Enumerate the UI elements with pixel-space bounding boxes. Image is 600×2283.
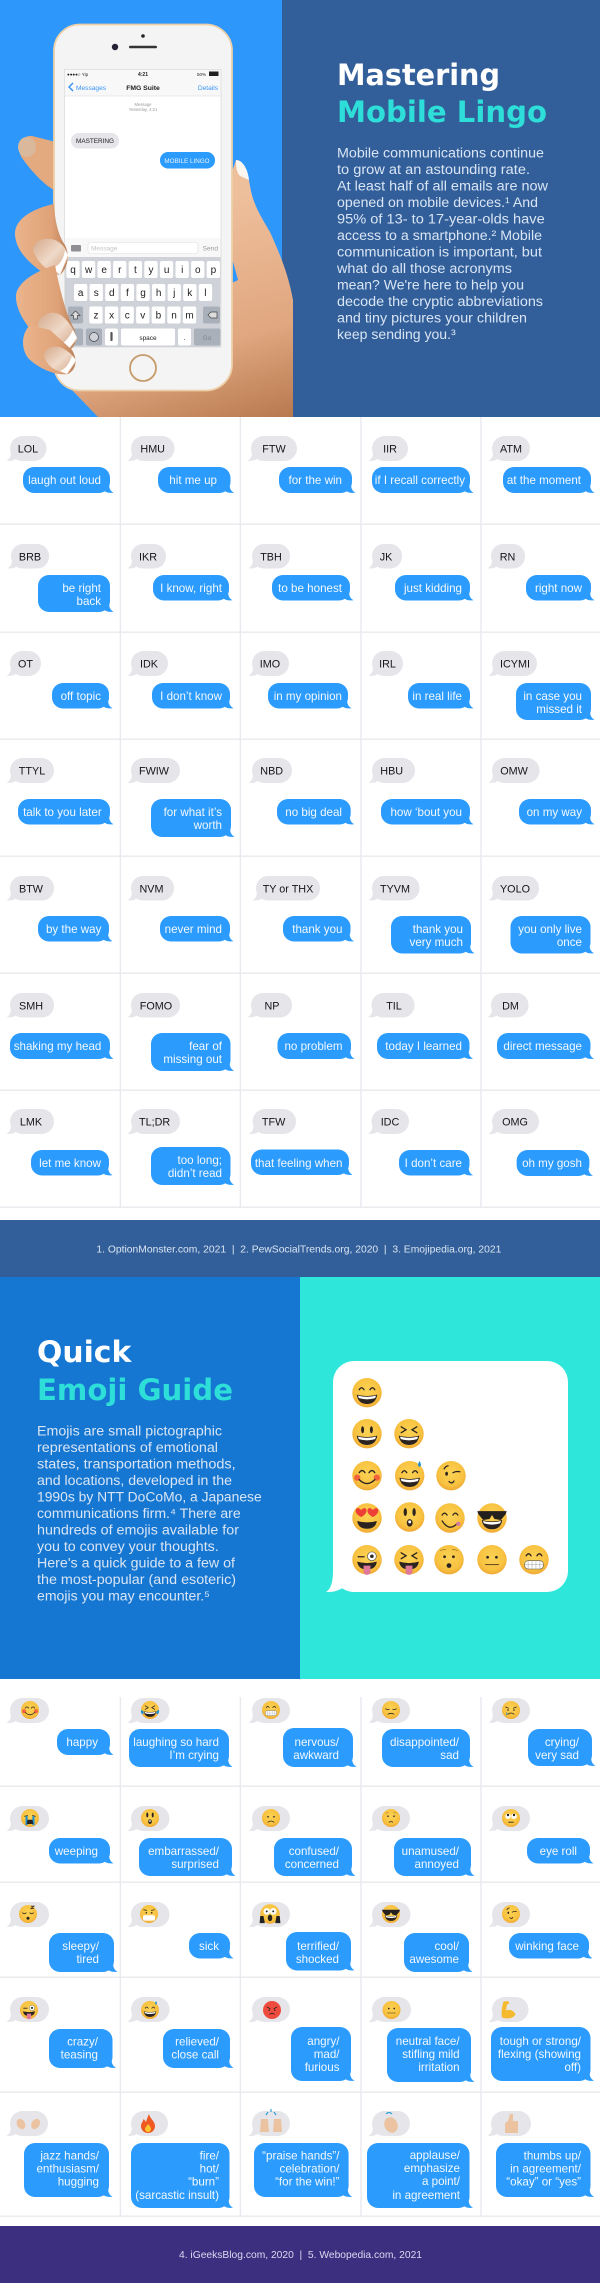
phone keyboard: n	[171, 310, 177, 322]
phone keyboard: f	[126, 288, 129, 299]
relieved: relieved/	[175, 2036, 220, 2048]
crazy: crazy/	[67, 2036, 99, 2048]
sleepy: sleepy/	[62, 1940, 100, 1953]
TBH: to be honest	[278, 582, 343, 595]
finger with french nail, upper	[15, 204, 68, 275]
weeping: weeping	[54, 1845, 98, 1858]
thumbs up: “okay” or “yes”	[506, 2176, 581, 2188]
illustration: hand holding phone	[15, 24, 293, 417]
panel: emoji grid	[6, 1698, 596, 2208]
nervous: nervous/	[295, 1736, 340, 1749]
terrified	[248, 1902, 354, 1970]
phone body	[54, 24, 232, 390]
relieved: close call	[171, 2048, 219, 2062]
sleepy: tired	[76, 1953, 99, 1966]
unamused	[368, 1806, 474, 1876]
TFW: that feeling when	[255, 1157, 342, 1170]
IRL	[368, 651, 474, 708]
angry: mad/	[314, 2048, 340, 2061]
cool: cool/	[434, 1940, 460, 1953]
relieved	[128, 1997, 234, 2068]
sick	[128, 1902, 234, 1958]
phone keyboard: k	[187, 288, 193, 299]
tough or strong: tough or strong/	[500, 2035, 582, 2048]
emoji intro paragraph: and locations, developed in the	[37, 1473, 232, 1488]
FWIW: FWIW	[139, 766, 170, 778]
DM	[488, 993, 594, 1059]
phone keyboard: v	[140, 310, 145, 322]
applause: applause/	[410, 2149, 461, 2162]
sleepy	[6, 1902, 118, 1972]
OMG: oh my gosh	[522, 1157, 582, 1170]
TL;DR	[128, 1109, 234, 1185]
IRL: in real life	[412, 690, 462, 703]
phone screen: Yesterday, 4:21	[129, 107, 158, 112]
terrified: terrified/	[297, 1940, 340, 1953]
FTW	[248, 436, 356, 493]
disappointed: sad	[440, 1749, 459, 1762]
laughing so hard	[128, 1698, 232, 1767]
crazy	[6, 1997, 116, 2068]
DM: direct message	[503, 1040, 582, 1053]
TTYL	[6, 758, 114, 824]
angry: furious	[305, 2061, 340, 2074]
BRB: be right	[62, 582, 102, 595]
phone keyboard: .	[184, 335, 186, 342]
confused: concerned	[285, 1858, 339, 1871]
RN	[488, 544, 594, 600]
NBD: NBD	[260, 766, 283, 778]
TY or THX: TY or THX	[263, 884, 313, 896]
heading: Mastering Mobile Lingo: Mobile Lingo	[337, 95, 547, 129]
BTW: by the way	[46, 923, 102, 936]
unamused: annoyed	[415, 1858, 459, 1871]
cool	[368, 1902, 472, 1972]
weeping	[6, 1806, 114, 1864]
intro paragraph	[336, 146, 548, 342]
phone keyboard: a	[78, 288, 84, 299]
FOMO: fear of	[189, 1040, 223, 1053]
LOL: LOL	[18, 444, 38, 456]
BTW: BTW	[19, 884, 44, 896]
phone screen: Messages	[76, 85, 107, 92]
BTW	[6, 876, 112, 942]
phone keyboard: x	[109, 310, 114, 322]
footer bar: sources 1-3	[0, 1220, 600, 1277]
IIR: if I recall correctly	[375, 474, 465, 487]
praise hands	[248, 2109, 352, 2197]
TY or THX	[252, 876, 354, 942]
intro paragraph: mean? We're here to help you	[337, 278, 524, 292]
RN: RN	[500, 552, 515, 564]
panel: hero navy background	[282, 0, 600, 417]
LMK	[6, 1109, 112, 1176]
jazz hands: enthusiasm/	[36, 2162, 100, 2176]
neutral face: neutral face/	[396, 2035, 460, 2048]
applause: in agreement	[392, 2189, 461, 2202]
jazz hands: hugging	[58, 2176, 99, 2188]
praise hands: celebration/	[280, 2162, 340, 2176]
laughing so hard: I’m crying	[169, 1749, 219, 1762]
phone screen: Details	[198, 85, 219, 92]
emoji intro paragraph: communications firm.⁴ There are	[37, 1506, 241, 1521]
crying	[488, 1698, 596, 1766]
IDK: I don’t know	[160, 690, 223, 703]
phone screen	[64, 70, 221, 347]
OT: off topic	[61, 690, 101, 703]
IKR: IKR	[139, 552, 157, 564]
back finger behind phone	[18, 136, 56, 191]
emoji intro paragraph: hundreds of emojis available for	[37, 1522, 240, 1538]
FWIW	[128, 758, 234, 837]
embarrassed: surprised	[171, 1858, 219, 1871]
LOL	[6, 436, 114, 493]
phone screen: MOBILE LINGO	[164, 158, 210, 165]
neutral face	[368, 1997, 474, 2082]
fire	[128, 2111, 233, 2208]
TIL: today I learned	[385, 1040, 462, 1053]
SMH: shaking my head	[14, 1040, 101, 1053]
IDC	[368, 1109, 473, 1176]
praise hands: “for the win!”	[275, 2176, 340, 2188]
BRB	[8, 544, 114, 612]
panel: lingo grid	[6, 436, 594, 1185]
emoji intro paragraph: representations of emotional	[37, 1440, 218, 1455]
IDC: I don’t care	[405, 1157, 462, 1170]
thumbs up	[488, 2111, 594, 2197]
confused: confused/	[289, 1845, 340, 1858]
fire: fire/	[200, 2150, 220, 2162]
NBD: no big deal	[285, 806, 342, 819]
phone keyboard: d	[109, 288, 115, 299]
tough or strong: flexing (showing	[498, 2048, 581, 2061]
happy	[6, 1698, 114, 1755]
TYVM: TYVM	[380, 884, 410, 896]
phone keyboard: c	[125, 310, 130, 322]
phone screen: Message	[91, 246, 118, 252]
phone keyboard: z	[94, 310, 98, 322]
IDK: IDK	[140, 658, 159, 670]
phone screen: FMG Suite	[126, 85, 160, 92]
TYVM: very much	[410, 936, 463, 949]
FWIW: for what it’s	[164, 806, 222, 819]
angry: angry/	[307, 2035, 340, 2048]
ATM	[488, 436, 594, 493]
TIL: TIL	[386, 1000, 402, 1012]
phone keyboard: w	[84, 265, 93, 276]
phone keyboard: y	[148, 265, 154, 276]
neutral face: irritation	[418, 2061, 460, 2074]
ATM: at the moment	[507, 474, 582, 487]
intro paragraph: to grow at an astounding rate.	[337, 162, 530, 177]
phone keyboard: p	[211, 265, 217, 276]
TTYL: talk to you later	[23, 806, 102, 819]
finger with french nail, middle	[16, 265, 77, 350]
LMK: let me know	[39, 1157, 102, 1170]
heading: Mastering Mobile Lingo	[337, 58, 547, 129]
IKR	[128, 544, 232, 600]
NVM	[128, 876, 234, 942]
tough or strong	[488, 1997, 594, 2081]
TYVM: thank you	[413, 923, 463, 936]
phone keyboard: m	[185, 310, 194, 322]
SMH: SMH	[19, 1000, 43, 1012]
heading: Quick Emoji Guide	[37, 1335, 233, 1407]
intro paragraph: and tiny pictures your children	[337, 310, 527, 326]
emoji intro paragraph	[37, 1424, 262, 1604]
terrified: shocked	[296, 1953, 339, 1966]
IMO: in my opinion	[274, 690, 342, 703]
OMG	[488, 1109, 593, 1176]
OMW	[488, 758, 594, 824]
crazy: teasing	[61, 2048, 98, 2062]
phone keyboard: space	[139, 335, 157, 342]
intro paragraph: access to a smartphone.² Mobile	[337, 228, 542, 243]
intro paragraph: At least half of all emails are now	[337, 178, 548, 194]
footer bar: sources 4-5	[0, 2226, 600, 2283]
phone keyboard: s	[94, 288, 99, 299]
applause	[367, 2111, 473, 2208]
thumbs up: in agreement/	[510, 2162, 582, 2176]
phone keyboard: h	[156, 288, 161, 299]
praise hands: “praise hands”/	[262, 2150, 340, 2162]
emoji intro paragraph: Here's a quick guide to a few of	[37, 1556, 235, 1570]
phone keyboard: l	[204, 288, 207, 299]
HBU	[368, 758, 474, 824]
FOMO: missing out	[163, 1053, 223, 1066]
DM: DM	[502, 1000, 519, 1012]
JK	[368, 544, 474, 600]
OT: OT	[18, 658, 33, 670]
emoji intro paragraph: Emojis are small pictographic	[37, 1424, 222, 1438]
fire: “burn”	[188, 2176, 219, 2188]
phone screen: 4:21	[138, 72, 148, 78]
TIL	[368, 993, 473, 1059]
phone keyboard	[65, 257, 220, 347]
intro paragraph: keep sending you.³	[337, 327, 456, 342]
TL;DR: TL;DR	[139, 1116, 170, 1128]
sick: sick	[199, 1940, 219, 1953]
embarrassed	[128, 1806, 236, 1876]
crying: crying/	[545, 1736, 580, 1749]
LMK: LMK	[20, 1116, 43, 1128]
home button	[130, 355, 156, 381]
NP: NP	[264, 1000, 280, 1012]
angry	[248, 1997, 354, 2081]
OMG: OMG	[502, 1116, 528, 1128]
neutral face: stifling mild	[402, 2048, 460, 2061]
NP: no problem	[284, 1040, 342, 1053]
IRL: IRL	[379, 658, 396, 670]
TL;DR: didn’t read	[168, 1167, 222, 1180]
ICYMI: ICYMI	[500, 658, 530, 670]
confused	[248, 1806, 356, 1876]
OMW: OMW	[500, 766, 529, 778]
phone keyboard: Go	[203, 335, 212, 342]
eye roll: eye roll	[540, 1845, 577, 1858]
phone keyboard: q	[70, 265, 76, 276]
cool: awesome	[409, 1953, 459, 1966]
winking face: winking face	[514, 1940, 579, 1953]
emoji intro paragraph: emojis you may encounter.⁵	[37, 1588, 210, 1604]
RN: right now	[535, 582, 583, 595]
ICYMI: missed it	[536, 703, 583, 716]
emoji intro paragraph: the most-popular (and esoteric)	[37, 1572, 236, 1587]
intro paragraph: opened on mobile devices.¹ And	[337, 195, 538, 210]
phone screen: Message	[134, 102, 152, 107]
happy: happy	[66, 1736, 98, 1749]
NVM: never mind	[165, 923, 222, 936]
intro paragraph: 95% of 13- to 17-year-olds have	[337, 212, 545, 226]
unamused: unamused/	[402, 1845, 460, 1858]
applause: a point/	[422, 2175, 461, 2188]
winking face	[488, 1902, 592, 1958]
IDC: IDC	[381, 1116, 399, 1128]
HMU: HMU	[140, 444, 165, 456]
HBU: HBU	[380, 766, 403, 778]
eye roll	[488, 1806, 594, 1864]
HMU	[128, 436, 234, 493]
LOL: laugh out loud	[28, 474, 101, 487]
phone keyboard: j	[172, 288, 175, 299]
nervous: awkward	[293, 1749, 339, 1762]
YOLO: you only live	[518, 923, 582, 936]
TFW	[249, 1109, 352, 1175]
phone keyboard: g	[140, 288, 146, 299]
intro paragraph: what do all those acronyms	[336, 261, 512, 276]
phone screen: MASTERING	[76, 138, 114, 145]
phone keyboard: u	[164, 265, 169, 276]
YOLO	[488, 876, 594, 954]
TFW: TFW	[262, 1116, 286, 1128]
phone keyboard: b	[156, 310, 162, 322]
BRB: back	[76, 595, 101, 608]
emoji intro paragraph: you to convey your thoughts.	[37, 1539, 219, 1554]
thumbs up: thumbs up/	[524, 2150, 582, 2162]
phone keyboard: i	[181, 265, 183, 276]
footer bar: sources 1-3: 1. OptionMonster.com, 2021 | 2. PewSocialTrends.org, 2020 | 3. Emojipedia.org, 2021	[96, 1243, 502, 1255]
BRB: BRB	[19, 552, 41, 564]
finger with french nail, lower	[23, 325, 76, 374]
IKR: I know, right	[160, 582, 223, 595]
phone screen: Send	[203, 246, 218, 252]
disappointed	[368, 1698, 474, 1767]
phone keyboard: r	[118, 265, 122, 276]
IDK	[128, 651, 234, 708]
phone keyboard: o	[195, 265, 201, 276]
TTYL: TTYL	[19, 766, 45, 778]
FTW: for the win	[288, 474, 342, 487]
NBD	[248, 758, 354, 824]
crying: very sad	[535, 1749, 579, 1762]
JK: just kidding	[403, 582, 462, 595]
TY or THX: thank you	[292, 923, 342, 936]
phone screen: 50%	[197, 72, 206, 77]
laughing so hard: laughing so hard	[133, 1736, 219, 1749]
disappointed: disappointed/	[390, 1736, 460, 1749]
IIR	[368, 436, 474, 493]
YOLO: once	[557, 936, 582, 949]
intro paragraph: decode the cryptic abbreviations	[337, 294, 543, 309]
heading: Quick Emoji Guide: Emoji Guide	[37, 1373, 233, 1407]
FTW: FTW	[262, 444, 286, 456]
fire: (sarcastic insult)	[135, 2189, 219, 2202]
heading: Mastering Mobile Lingo: Mastering	[337, 58, 500, 92]
HBU: how ‘bout you	[390, 806, 462, 819]
applause: emphasize	[404, 2162, 460, 2175]
JK: JK	[380, 552, 393, 564]
IMO: IMO	[260, 658, 280, 670]
panel: hero blue background	[0, 0, 282, 417]
nervous	[248, 1698, 356, 1767]
jazz hands: jazz hands/	[39, 2150, 100, 2162]
tough or strong: off)	[564, 2061, 581, 2074]
OMW: on my way	[527, 806, 582, 819]
HMU: hit me up	[169, 474, 217, 487]
FOMO	[128, 993, 234, 1071]
heading: Quick Emoji Guide: Quick	[37, 1335, 133, 1369]
TBH	[248, 544, 354, 600]
intro paragraph: Mobile communications continue	[337, 146, 544, 160]
fire: hot/	[200, 2162, 220, 2176]
palm and thumb	[70, 160, 293, 417]
TL;DR: too long;	[178, 1154, 222, 1167]
phone keyboard: t	[134, 265, 137, 276]
IMO	[248, 651, 352, 708]
white message bubble with emoji collection	[326, 1361, 568, 1592]
jazz hands	[6, 2111, 112, 2197]
OT	[6, 651, 112, 708]
FWIW: worth	[193, 819, 222, 832]
intro paragraph: communication is important, but	[337, 244, 542, 260]
TYVM	[368, 876, 474, 954]
NVM: NVM	[140, 884, 164, 896]
footer bar: sources 4-5: 4. iGeeksBlog.com, 2020 | 5. Webopedia.com, 2021	[179, 2249, 422, 2261]
IIR: IIR	[383, 444, 397, 456]
ICYMI: in case you	[523, 690, 582, 703]
NP	[248, 993, 354, 1059]
phone screen: ●●●●○ Yip	[67, 72, 89, 77]
YOLO: YOLO	[500, 884, 530, 896]
FOMO: FOMO	[140, 1000, 172, 1012]
panel: emoji guide blue background	[0, 1277, 300, 1679]
emoji intro paragraph: 1990s by NTT DoCoMo, a Japanese	[37, 1490, 262, 1504]
embarrassed: embarrassed/	[148, 1845, 220, 1858]
phone keyboard: e	[101, 265, 107, 276]
SMH	[6, 993, 114, 1059]
panel: emoji guide teal background	[300, 1277, 600, 1679]
TBH: TBH	[260, 552, 282, 564]
emoji intro paragraph: states, transportation methods,	[37, 1456, 236, 1472]
ATM: ATM	[500, 444, 522, 456]
ICYMI	[488, 651, 594, 720]
